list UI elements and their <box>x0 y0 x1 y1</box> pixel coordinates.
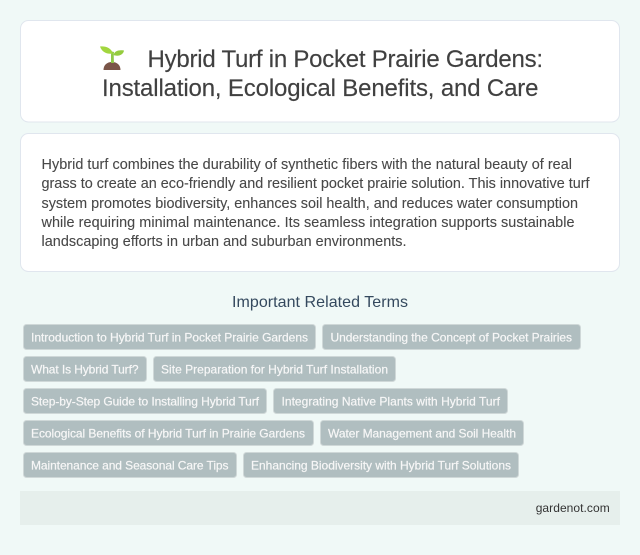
panel: related term chips <box>24 324 580 478</box>
description text: system promotes biodiversity, enhances soil health, and reduces water consumption <box>42 196 578 212</box>
chip: native plants: Integrating Native Plants with Hybrid Turf <box>282 394 501 408</box>
chip: introduction: Introduction to Hybrid Turf in Pocket Prairie Gardens <box>31 330 308 344</box>
chip: what is hybrid turf <box>24 356 146 382</box>
footer bar <box>20 491 620 525</box>
icon: sprout <box>100 46 124 70</box>
chip: maintenance <box>24 452 236 478</box>
title <box>102 46 543 102</box>
description text: landscaping efforts in urban and suburban environments. <box>42 234 406 250</box>
chip: water management: Water Management and Soil Health <box>328 426 516 440</box>
title: Installation, Ecological Benefits, and Care <box>102 75 538 102</box>
description text: Hybrid turf combines the durability of synthetic fibers with the natural beauty of real <box>42 157 572 173</box>
footer source text: gardenot.com <box>536 501 610 515</box>
chip: pocket prairies: Understanding the Concept of Pocket Prairies <box>330 330 572 344</box>
description text: while requiring minimal maintenance. Its seamless integration supports sustainable <box>40 215 574 231</box>
title: Hybrid Turf in Pocket Prairie Gardens: <box>148 46 543 73</box>
chip: biodiversity <box>244 452 518 478</box>
chip: ecological benefits: Ecological Benefits of Hybrid Turf in Prairie Gardens <box>31 426 305 440</box>
chip: site preparation <box>154 356 396 382</box>
chip: what is hybrid turf: What Is Hybrid Turf? <box>31 362 139 376</box>
panel: description card <box>20 134 620 272</box>
chip: maintenance: Maintenance and Seasonal Care Tips <box>31 458 228 472</box>
chip: step-by-step guide <box>24 388 266 414</box>
chip: ecological benefits <box>24 420 314 446</box>
description text: grass to create an eco-friendly and resilient pocket prairie solution. This innovative turf <box>42 176 590 192</box>
chip: step-by-step guide: Step-by-Step Guide to Installing Hybrid Turf <box>31 394 260 408</box>
chip: water management <box>320 420 524 446</box>
panel: title card <box>20 20 620 122</box>
heading: related terms: Important Related Terms <box>232 294 408 311</box>
chip: pocket prairies <box>322 324 580 350</box>
description text <box>40 157 590 250</box>
chip: biodiversity: Enhancing Biodiversity with Hybrid Turf Solutions <box>251 458 511 472</box>
chip: introduction <box>24 324 316 350</box>
chip: site preparation: Site Preparation for Hybrid Turf Installation <box>161 362 388 376</box>
chip: native plants <box>274 388 508 414</box>
